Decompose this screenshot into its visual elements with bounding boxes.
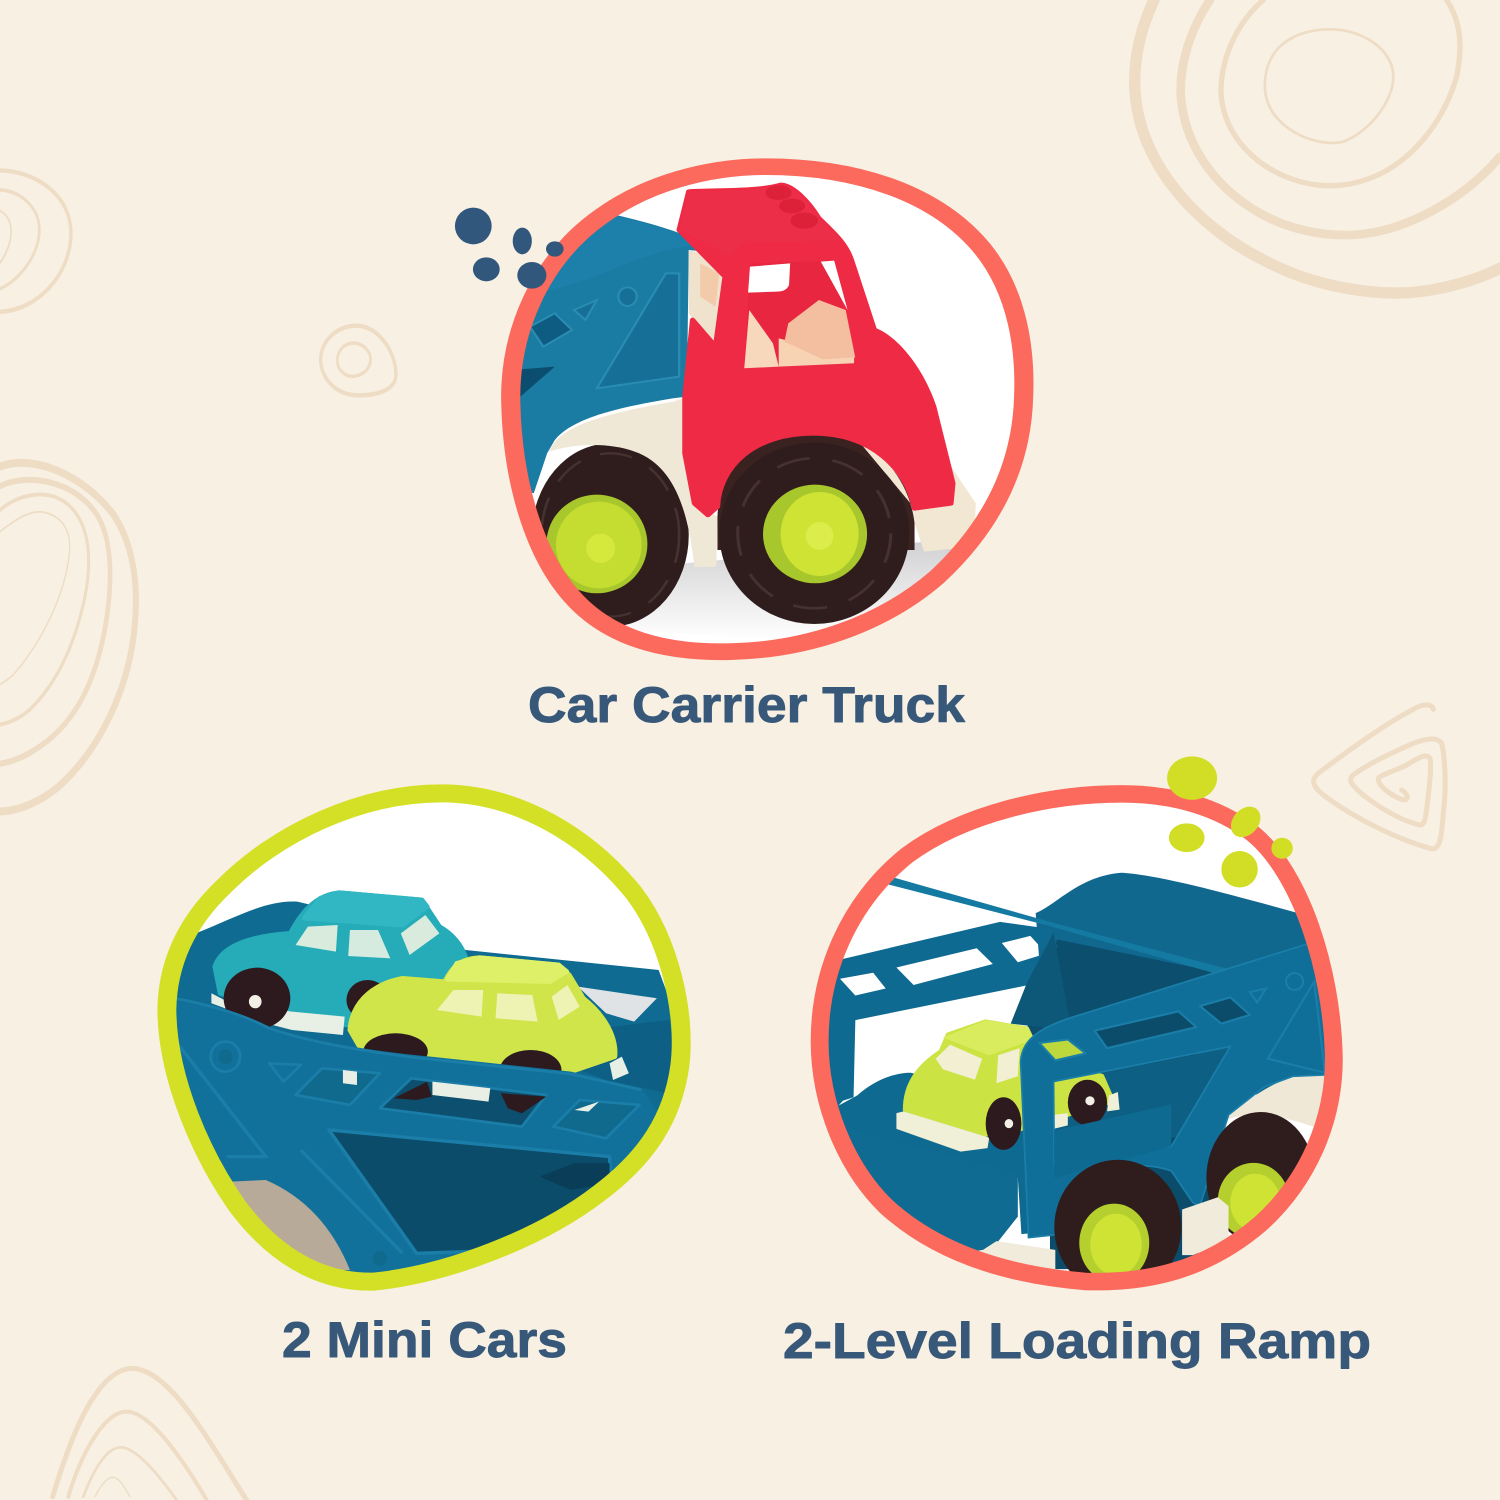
- carrier side rail: [176, 1008, 614, 1273]
- dark area behind wheels: [1050, 1136, 1211, 1269]
- lime mini car: [350, 958, 629, 1090]
- panel: 2-level loading ramp photo: [820, 756, 1336, 1294]
- decorative rings left side: [0, 170, 396, 811]
- front frame: [1021, 943, 1336, 1238]
- front wheel: [719, 443, 909, 624]
- cyan mini car: [211, 893, 467, 1035]
- rail windows: [269, 1063, 639, 1138]
- heading: Car Carrier Truck: Car Carrier Truck: [528, 677, 965, 733]
- cab window: [744, 261, 855, 368]
- decorative rings top right: [1135, 0, 1500, 293]
- rear wheel: [532, 443, 689, 627]
- lower deck: [838, 1072, 1028, 1234]
- panel ring: lime: [167, 793, 681, 1282]
- decorative arches bottom left: [53, 1368, 247, 1500]
- wheel arch shadow: [717, 432, 915, 550]
- frame windows: [1039, 973, 1325, 1073]
- rear fender: [549, 397, 717, 567]
- rear wheel: [1206, 1112, 1308, 1234]
- icon: navy dots: [455, 208, 564, 289]
- loading ramp: [846, 1130, 1018, 1251]
- icon: lime dots: [1167, 756, 1293, 888]
- panel: 2 mini cars photo: [164, 793, 687, 1287]
- heading: 2 Mini Cars: 2 Mini Cars: [282, 1312, 567, 1368]
- small lime car: [896, 1020, 1120, 1152]
- front bumper: [859, 442, 976, 552]
- heading: 2-Level Loading Ramp: 2-Level Loading Ramp: [783, 1313, 1371, 1369]
- raised ramp: [884, 876, 1236, 977]
- panel ring: coral: [820, 794, 1334, 1282]
- panel ring: coral: [511, 167, 1024, 652]
- red cab: [679, 185, 953, 515]
- cream chassis: [1228, 1076, 1324, 1127]
- cream blocks: [1182, 1197, 1229, 1255]
- panel: car carrier truck photo: [455, 167, 1024, 652]
- upper deck rail: [821, 922, 1057, 1115]
- front wheel: [1054, 1160, 1182, 1273]
- lower dark opening: [329, 1130, 611, 1253]
- decorative triangle spiral: [1314, 705, 1445, 849]
- grey rear wheel: [231, 1180, 350, 1270]
